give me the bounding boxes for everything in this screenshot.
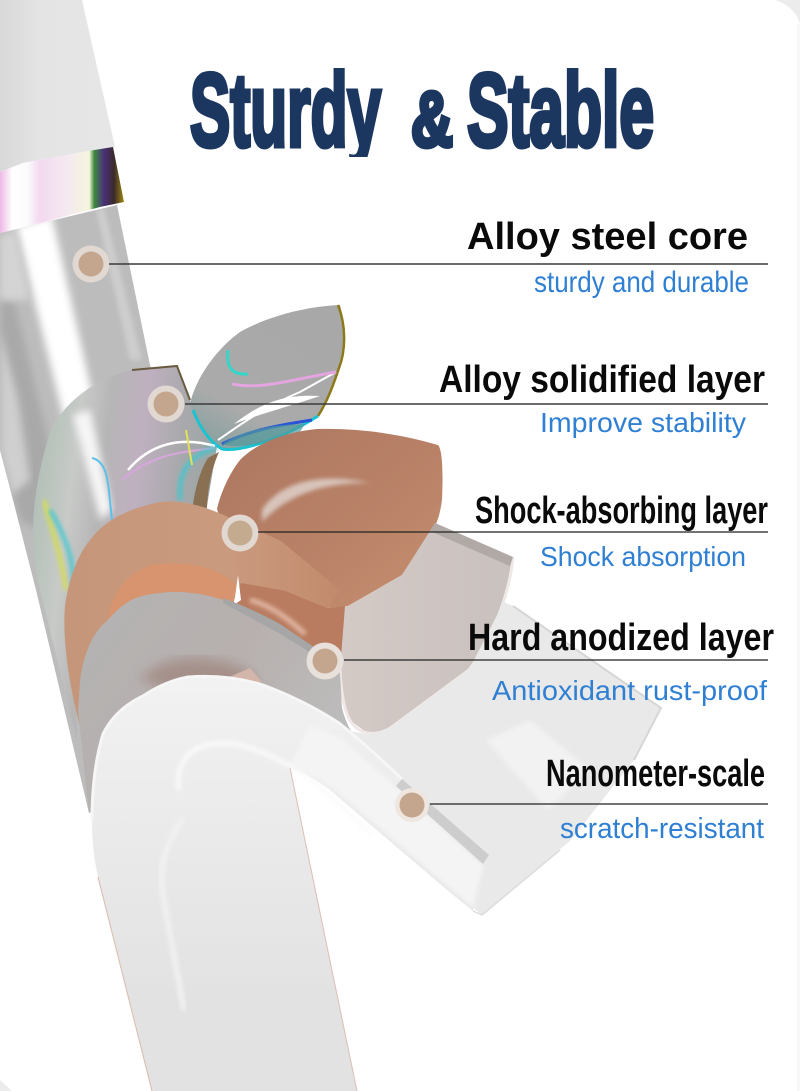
subtext: scratch-resistant [560,813,764,845]
leader line [185,403,768,405]
marker dot [222,514,258,552]
callout: shock-absorbing layer [222,490,768,572]
copper sliver under gray sheet [222,668,262,690]
callout: alloy solidified layer [148,359,768,438]
layer: shock-absorbing front copper sheet [64,502,340,726]
leader line [109,263,768,265]
heading: Alloy solidified layer [439,359,765,401]
layer: pale translucent sheet [328,523,513,735]
under-copper fold [235,580,345,670]
callout: nanometer-scale [395,753,768,845]
gray sheet shadow [140,658,262,690]
subtext: Shock absorption [540,541,746,572]
title: Stable [467,53,654,169]
title: Sturdy [190,53,381,169]
sheet rim [340,557,513,733]
subtext: Antioxidant rust-proof [492,675,767,706]
marker dot [72,246,110,282]
anodized rim [513,606,661,760]
callout: hard anodized layer [306,617,774,706]
layer: alloy solidified holographic sheet [33,305,344,740]
leader line [430,803,768,805]
callout: alloy steel core [72,216,768,299]
subtext: sturdy and durable [534,266,749,299]
leader line [258,531,768,533]
leader line [344,659,768,661]
title: & [411,75,453,163]
layer: shock-absorbing back copper sheet [217,429,443,608]
marker dot [306,642,344,680]
layer: alloy steel core tube [0,205,151,813]
layer: gray anodized sheet [78,592,353,813]
layer: nanometer-scale white outer shell [92,676,560,1091]
sheet edge [430,523,513,566]
band: iridescent ring [0,147,124,233]
fold highlight [250,600,305,634]
anodized highlight [486,720,590,810]
marker dot [148,386,184,422]
heading: Alloy steel core [467,216,748,258]
gray sheet top edge [223,598,339,670]
layer: hard anodized translucent back [345,602,661,915]
title [190,68,654,157]
cap: upper white sleeve [0,0,115,172]
subtext: Improve stability [540,407,746,438]
marker dot [395,788,429,822]
